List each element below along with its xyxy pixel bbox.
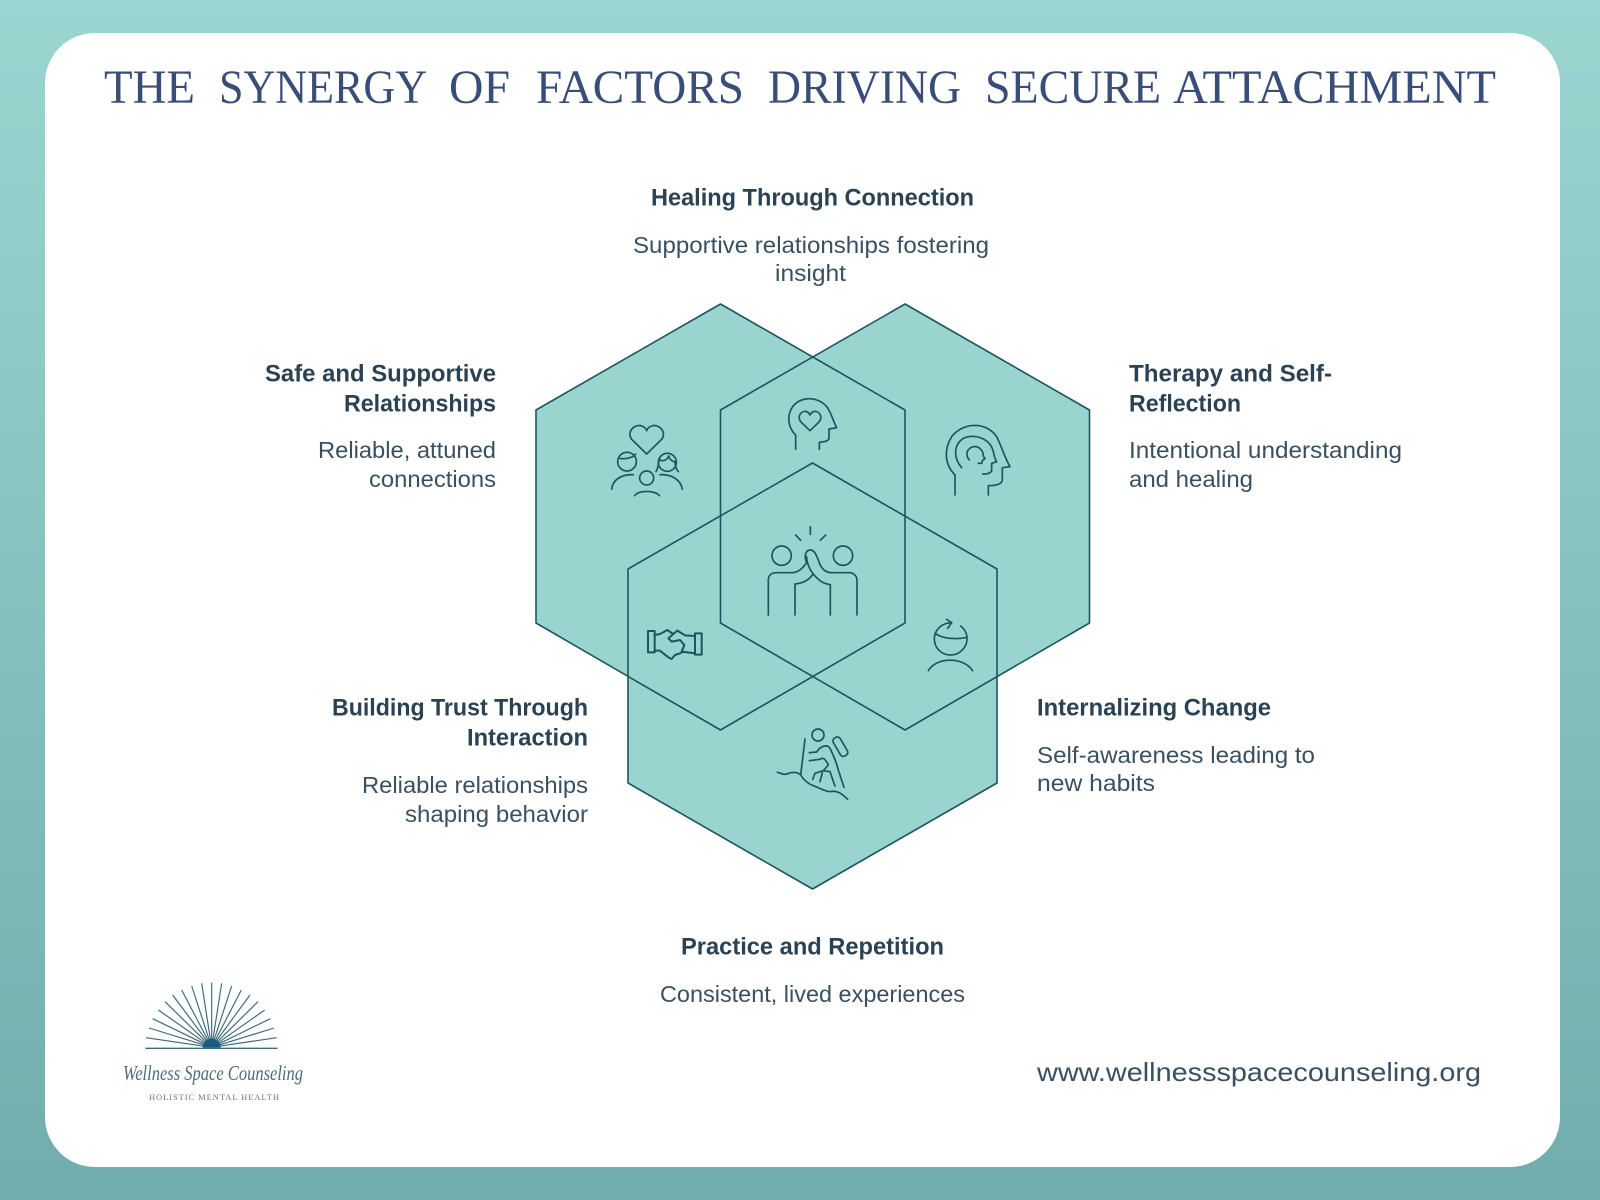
label: Healing Through Connection: Supportive relationships fostering <box>633 232 989 258</box>
label: Building Trust Through Interaction: Building Trust Through <box>332 694 588 722</box>
title: SYNERGY <box>219 61 427 114</box>
title: ATTACHMENT <box>1173 61 1496 114</box>
label: Building Trust Through Interaction: Reliable relationships <box>362 772 588 798</box>
label: Internalizing Change: Internalizing Change <box>1037 694 1271 722</box>
label: Safe and Supportive Relationships: Reliable, attuned <box>318 437 496 463</box>
label: Building Trust Through Interaction: Interaction <box>467 724 588 752</box>
venn diagram: three overlapping hexagons <box>536 304 1090 889</box>
hexagon outlines <box>536 304 1090 889</box>
label: Therapy and Self-Reflection: Therapy and Self- <box>1129 360 1332 388</box>
label: Safe and Supportive Relationships: Safe and Supportive <box>265 360 496 388</box>
title <box>104 61 1496 114</box>
icon: climber <box>777 729 849 799</box>
icon: people with heart <box>612 425 682 496</box>
label: Internalizing Change: new habits <box>1037 770 1155 796</box>
icon: head with heart <box>789 399 837 449</box>
label: Internalizing Change <box>1037 694 1315 796</box>
label: Therapy and Self-Reflection: Reflection <box>1129 390 1241 418</box>
title: SECURE <box>985 61 1161 114</box>
label: Safe and Supportive Relationships <box>265 360 496 492</box>
icon: high five <box>768 527 857 615</box>
website url: www.wellnessspacecounseling.org <box>1036 1057 1481 1087</box>
label: Healing Through Connection <box>633 184 989 286</box>
label: Building Trust Through Interaction <box>332 694 588 827</box>
label: Therapy and Self-Reflection: Intentional understanding <box>1129 437 1402 463</box>
title: OF <box>449 61 510 114</box>
label: Safe and Supportive Relationships: connections <box>369 466 496 492</box>
logo script name: Wellness Space Counseling <box>123 1061 303 1085</box>
title: THE <box>104 61 195 114</box>
hexagon fills <box>536 304 1090 889</box>
logo tagline: HOLISTIC MENTAL HEALTH <box>149 1092 279 1102</box>
icon: handshake <box>648 630 702 659</box>
logo sunburst <box>145 983 278 1048</box>
label: Safe and Supportive Relationships: Relationships <box>344 390 496 418</box>
label: Practice and Repetition <box>660 934 965 1007</box>
label: Therapy and Self-Reflection: and healing <box>1129 466 1253 492</box>
label: Building Trust Through Interaction: shaping behavior <box>405 801 588 827</box>
label: Practice and Repetition: Consistent, lived experiences <box>660 981 965 1007</box>
label: Internalizing Change: Self-awareness leading to <box>1037 742 1315 768</box>
title: DRIVING <box>768 61 961 114</box>
logo: Wellness Space Counseling <box>123 983 303 1102</box>
title: FACTORS <box>536 61 744 114</box>
label: Therapy and Self-Reflection <box>1129 360 1402 492</box>
label: Healing Through Connection: insight <box>775 260 847 286</box>
icon: person with change arrow <box>928 619 973 671</box>
label: Practice and Repetition: Practice and Repetition <box>681 934 944 960</box>
icon: head with spiral <box>946 425 1010 495</box>
label: Healing Through Connection: Healing Through Connection <box>651 184 974 212</box>
